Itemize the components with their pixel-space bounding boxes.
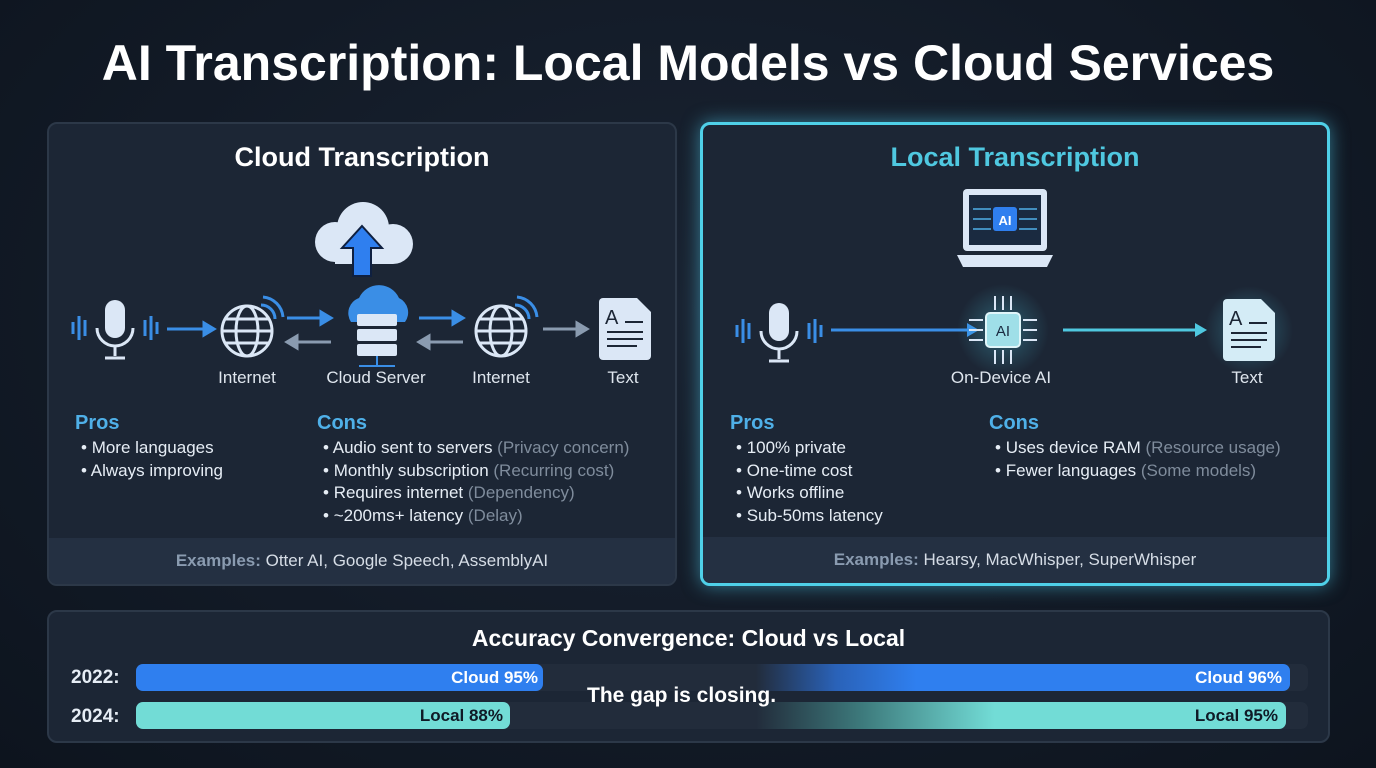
- cons list: ~200ms+ latency (Delay): [334, 506, 523, 524]
- arrows: [831, 328, 969, 332]
- icon: document: A: [605, 307, 619, 329]
- pros heading: Pros: [75, 412, 119, 434]
- heading: cloud: Cloud Transcription: [234, 142, 490, 172]
- bar: 2024: Local 88%: [420, 706, 503, 725]
- cons list: Monthly subscription (Recurring cost): [334, 460, 614, 480]
- icon: cloud upload: [315, 202, 413, 276]
- title: AI Transcription: Local Models vs Cloud Services: [102, 35, 1274, 91]
- icon: on-device AI chip: [957, 284, 1049, 376]
- icon: laptop: [957, 189, 1053, 267]
- pros list: [82, 438, 223, 480]
- pros list: 100% private: [747, 438, 846, 457]
- label: text: Text: [607, 368, 639, 387]
- label: 2022: 2022:: [71, 667, 120, 688]
- label: internet 2: Internet: [472, 368, 530, 387]
- pros list: Always improving: [91, 460, 223, 480]
- cons heading: Cons: [317, 412, 367, 434]
- callout: gap closing: The gap is closing.: [587, 684, 776, 707]
- pros list: [736, 438, 883, 524]
- pros heading: Pros: [730, 412, 774, 434]
- icon: document glowing: A: [1229, 308, 1243, 330]
- label: on-device AI: On-Device AI: [951, 368, 1051, 387]
- cons list: [996, 438, 1281, 480]
- examples: Examples: Otter AI, Google Speech, AssemblyAI: [176, 551, 548, 570]
- bar: 2024: Local 95%: [1195, 706, 1278, 725]
- icon: laptop: AI: [998, 213, 1012, 228]
- examples: Examples: Hearsy, MacWhisper, SuperWhisper: [834, 550, 1196, 569]
- bar: 2022: [136, 664, 1308, 691]
- panel: cloud transcription: [47, 122, 677, 586]
- icon: cloud server: [348, 285, 408, 366]
- pros list: Works offline: [747, 483, 844, 502]
- arrows: [167, 312, 463, 335]
- examples: [703, 537, 1327, 583]
- icon: microphone: [73, 300, 157, 358]
- icon: globe 1: [222, 297, 283, 356]
- bar: 2024: [136, 702, 1308, 729]
- label: internet: Internet: [218, 368, 276, 387]
- panel: accuracy convergence: [47, 610, 1330, 743]
- heading: local: Local Transcription: [890, 142, 1140, 172]
- pros list: One-time cost: [747, 460, 852, 480]
- cons list: Audio sent to servers (Privacy concern): [333, 438, 629, 457]
- bar: 2022: Cloud 96%: [1195, 668, 1282, 687]
- panel: local transcription: [700, 122, 1330, 586]
- cons list: Requires internet (Dependency): [334, 483, 575, 502]
- label: text: Text: [1231, 368, 1263, 387]
- bar: 2022: Cloud 95%: [451, 668, 538, 687]
- cons list: Uses device RAM (Resource usage): [1006, 438, 1281, 457]
- label: cloud server: Cloud Server: [326, 368, 426, 387]
- cloud flow diagram: [72, 202, 651, 367]
- examples: [49, 538, 675, 584]
- chart heading: Accuracy Convergence: Cloud vs Local: [472, 625, 905, 651]
- icon: document: [599, 298, 651, 360]
- icon: document glowing: [1205, 286, 1293, 374]
- cons list: Fewer languages (Some models): [1006, 460, 1256, 480]
- icon: on-device AI chip: AI: [996, 323, 1010, 340]
- pros list: Sub-50ms latency: [747, 506, 883, 524]
- label: 2024: 2024:: [71, 706, 120, 727]
- cons list: [324, 438, 629, 524]
- local flow diagram: [736, 189, 1287, 370]
- pros list: More languages: [92, 438, 214, 457]
- icon: globe 2: [476, 297, 537, 356]
- icon: microphone: [737, 303, 821, 361]
- cons heading: Cons: [989, 412, 1039, 434]
